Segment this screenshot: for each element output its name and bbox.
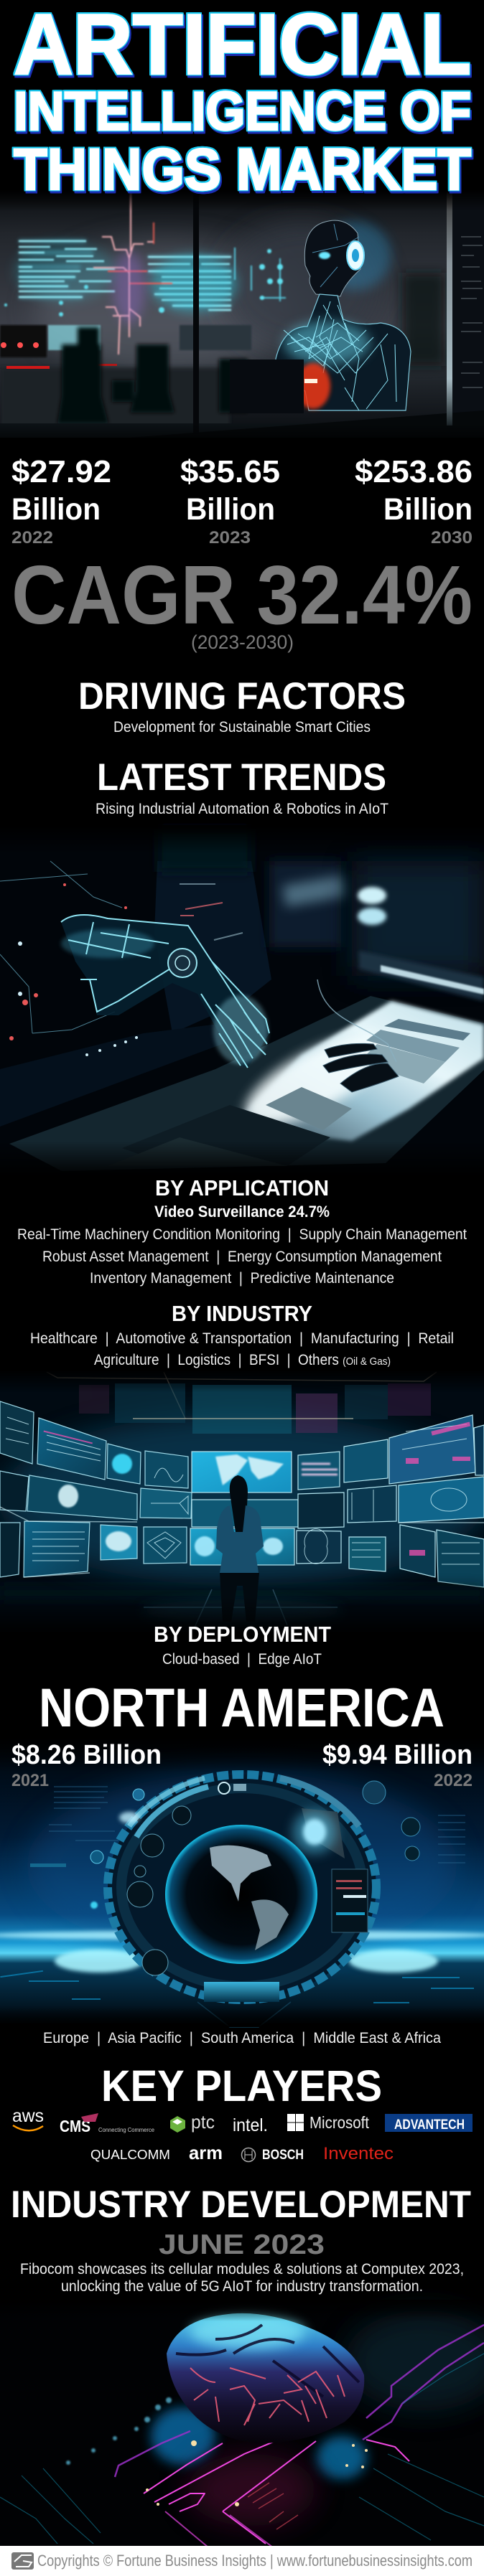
latest trends: LATEST TRENDS <box>97 756 386 799</box>
logo: ptc <box>170 2111 215 2133</box>
driving factors: Development for Sustainable Smart Cities <box>113 719 371 735</box>
stat: 2023 market value: 2023 <box>209 528 251 547</box>
driving factors <box>78 675 406 735</box>
other regions: Europe | Asia Pacific | South America | Middle East & Africa <box>43 2030 441 2046</box>
stat: 2022 market value: 2022 <box>11 528 53 547</box>
stat: 2023 market value <box>180 454 280 547</box>
by deployment: Cloud-based | Edge AIoT <box>162 1651 322 1668</box>
stat: 2023 market value: Billion <box>186 492 275 527</box>
chip on board <box>248 2483 298 2529</box>
by application: Video Surveillance 24.7% <box>154 1203 330 1221</box>
CAGR figure: (2023-2030) <box>191 631 294 653</box>
by industry: Healthcare | Automotive & Transportation | Manufacturing | Retail <box>30 1330 454 1347</box>
stat: 2023 market value: $35.65 <box>180 454 280 489</box>
logo: CMS: Connecting Commerce <box>98 2127 155 2133</box>
industry development: JUNE 2023 <box>159 2229 325 2260</box>
logo: Advantech: ADVANTECH <box>394 2117 465 2133</box>
logo: Qualcomm: QUALCOMM <box>90 2148 170 2162</box>
north america 2022 value: 2022 <box>434 1771 473 1790</box>
woman silhouette <box>216 1475 264 1622</box>
by industry: Agriculture | Logistics | BFSI | Others (Oil & Gas) <box>94 1352 391 1368</box>
logo: CMS <box>60 2113 155 2135</box>
image: glowing brain on circuit board <box>0 2300 484 2547</box>
footer bar <box>0 2546 484 2576</box>
hero image: AI robot in control room <box>0 189 484 449</box>
stat: 2022 market value: $27.92 <box>11 454 111 489</box>
latest trends <box>96 756 388 817</box>
logo: CMS: CMS <box>60 2117 90 2135</box>
by application: Robust Asset Management | Energy Consumption Management <box>42 1249 442 1265</box>
logo: Inventec: Inventec <box>323 2144 394 2163</box>
title <box>14 0 471 202</box>
left screens <box>0 1401 192 1577</box>
stat: 2030 market value <box>355 454 473 547</box>
image: woman facing wall of data screens <box>0 1369 484 1636</box>
logo: Microsoft <box>287 2113 370 2132</box>
industry development <box>11 2184 471 2295</box>
by application: BY APPLICATION <box>155 1175 329 1200</box>
by deployment <box>154 1622 331 1668</box>
logo: intel: intel. <box>233 2115 268 2135</box>
screen details <box>6 1417 480 1564</box>
stat: 2022 market value: Billion <box>11 492 101 527</box>
logo: Microsoft: Microsoft <box>310 2113 370 2132</box>
robot figure <box>129 220 484 438</box>
driving factors: DRIVING FACTORS <box>78 675 406 718</box>
by application <box>17 1175 467 1287</box>
logo: Bosch <box>241 2148 304 2163</box>
by industry: BY INDUSTRY <box>172 1301 312 1326</box>
stat: 2030 market value: 2030 <box>431 528 473 547</box>
north america 2022 value <box>322 1740 473 1790</box>
brain <box>167 2313 364 2443</box>
small black robotic hand <box>323 1043 399 1092</box>
industry development: unlocking the value of 5G AIoT for industry transformation. <box>61 2278 423 2295</box>
image: futuristic globe <box>0 1736 484 2027</box>
glass robotic hand <box>61 915 269 1068</box>
key players heading: KEY PLAYERS <box>101 2062 382 2110</box>
by deployment: BY DEPLOYMENT <box>154 1622 331 1647</box>
side data readouts <box>30 1781 465 1909</box>
by industry <box>30 1301 454 1368</box>
north america 2022 value: $9.94 Billion <box>322 1740 473 1770</box>
logo: ptc: ptc <box>191 2111 215 2133</box>
logo: aws: aws <box>12 2106 44 2126</box>
north america 2021 value <box>11 1740 162 1790</box>
control room desks and chairs <box>0 325 484 438</box>
center and right screens <box>190 1415 484 1587</box>
globe ring machinery <box>108 1774 376 2027</box>
latest trends: Rising Industrial Automation & Robotics in AIoT <box>96 801 388 817</box>
footer logo <box>11 2552 34 2570</box>
north america 2021 value: $8.26 Billion <box>11 1740 162 1770</box>
logo: Advantech <box>385 2114 473 2133</box>
image: robotic hand over control panel <box>0 825 484 1177</box>
by application: Inventory Management | Predictive Maintenance <box>90 1270 394 1287</box>
stat: 2030 market value: Billion <box>383 492 473 527</box>
stat: 2030 market value: $253.86 <box>355 454 473 489</box>
upper dim screens <box>79 1383 431 1434</box>
circuit traces <box>0 2325 484 2547</box>
control panel <box>9 979 484 1171</box>
stat: 2022 market value <box>11 454 111 547</box>
logo: arm: arm <box>189 2142 223 2163</box>
logo: Bosch: BOSCH <box>262 2148 304 2163</box>
north america 2021 value: 2021 <box>11 1771 49 1790</box>
